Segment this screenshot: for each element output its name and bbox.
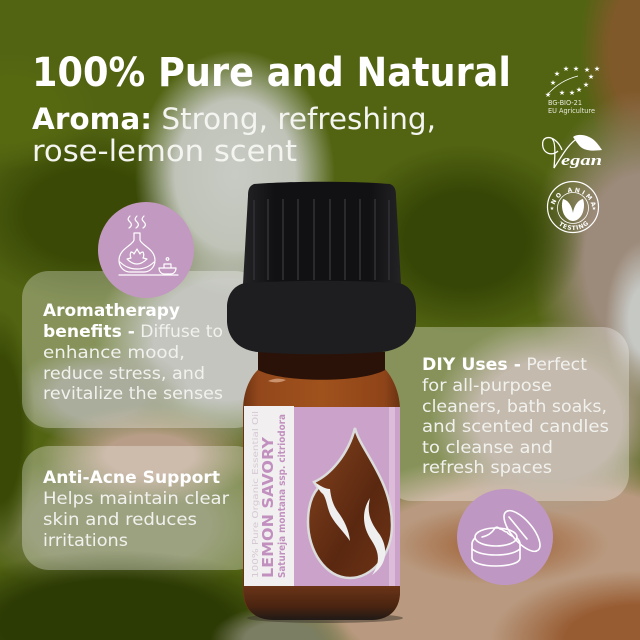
- cap ridges: [254, 199, 389, 280]
- aroma subtitle: [32, 102, 436, 168]
- icon: aroma diffuser: [98, 202, 194, 298]
- title: 100% Pure and Natural: [32, 50, 511, 96]
- badge: no animal testing: ★: [550, 206, 555, 212]
- leaf stars: ★: [584, 66, 590, 74]
- leaf stars: ★: [594, 65, 600, 73]
- panel: aromatherapy benefits: enhance mood,: [43, 343, 185, 363]
- bottle base: [244, 586, 400, 620]
- panel: DIY uses: for all-purpose: [422, 376, 552, 396]
- panel: DIY uses: cleaners, bath soaks,: [422, 397, 607, 417]
- aroma subtitle: rose-lemon scent: [32, 134, 297, 168]
- leaf stars: [545, 65, 600, 99]
- badge: EU organic: [545, 65, 600, 115]
- label: product name: Satureja montana ssp. citriodora: [277, 414, 288, 578]
- panel: aromatherapy benefits: Aromatherapy: [43, 301, 180, 321]
- glass highlight: [268, 379, 286, 382]
- dropper collar: [227, 281, 416, 354]
- badge: no animal testing: TESTING: [560, 221, 588, 230]
- bottle glass body: [243, 368, 400, 620]
- panel: anti-acne support: irritations: [43, 531, 128, 551]
- leaf stars: ★: [545, 91, 551, 99]
- panel: anti-acne support: Anti-Acne Support: [43, 468, 220, 488]
- leaf stars: ★: [583, 81, 589, 89]
- badge: no animal testing: NO ANIMAL: [550, 188, 596, 207]
- icon: cream jar: [457, 489, 553, 585]
- bottle neck: [258, 352, 385, 380]
- aroma subtitle: Aroma: Strong, refreshing,: [32, 102, 436, 136]
- cap: [243, 182, 401, 284]
- bottle: [227, 182, 416, 623]
- panel: DIY uses: and scented candles: [422, 417, 609, 437]
- badge: EU organic: EU Agriculture: [548, 107, 595, 115]
- label: product name: 100% Pure Organic Essential Oil: [251, 411, 260, 578]
- panel: aromatherapy benefits: reduce stress, and: [43, 364, 205, 384]
- leaf stars: ★: [559, 89, 565, 97]
- leaf stars: ★: [576, 86, 582, 94]
- bottle shadow: [247, 613, 403, 623]
- leaf stars: ★: [563, 65, 569, 73]
- badge: vegan: egan: [561, 153, 602, 169]
- label: pink: [294, 407, 400, 586]
- leaf stars: ★: [569, 89, 575, 97]
- panel: DIY uses: [385, 327, 629, 501]
- badge: EU organic: BG-BIO-21: [548, 99, 582, 107]
- label: product name: LEMON SAVORY: [259, 436, 277, 578]
- badge: vegan: [543, 135, 602, 169]
- panel: aromatherapy benefits: [22, 271, 262, 428]
- panel: aromatherapy benefits: benefits - Diffuse to: [43, 322, 223, 342]
- label: highlight: [389, 407, 395, 586]
- panel: anti-acne support: [22, 446, 262, 570]
- panel: DIY uses: DIY Uses - Perfect: [422, 355, 587, 375]
- leaf stars: ★: [550, 79, 556, 87]
- badge: no animal testing: ★: [592, 206, 597, 212]
- leaf stars: ★: [573, 65, 579, 73]
- label: product name: [251, 411, 288, 578]
- panel: anti-acne support: Helps maintain clear: [43, 489, 229, 509]
- panel: DIY uses: to cleanse and: [422, 438, 553, 458]
- panel: DIY uses: refresh spaces: [422, 458, 552, 478]
- badge: no animal testing: [546, 180, 600, 234]
- label: white strip: [244, 406, 294, 586]
- leaf stars: ★: [588, 73, 594, 81]
- leaf stars: ★: [554, 70, 560, 78]
- label: drop icon: [308, 428, 392, 578]
- panel: anti-acne support: skin and reduces: [43, 510, 197, 530]
- panel: aromatherapy benefits: revitalize the senses: [43, 384, 223, 404]
